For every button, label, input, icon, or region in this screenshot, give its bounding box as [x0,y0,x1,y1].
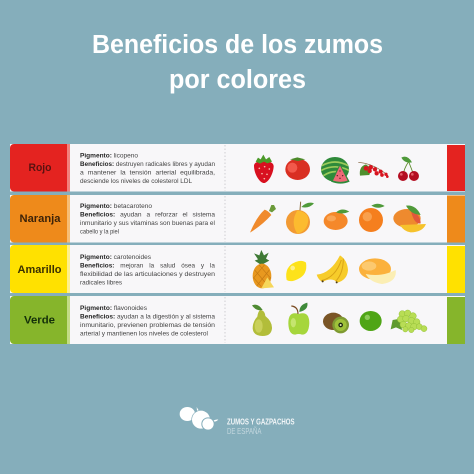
icon: lemon [286,261,306,281]
logo [180,407,295,436]
label: Naranja: Naranja [20,213,61,225]
text: rojo benefits: Beneficios: destruyen radicales libres y ayudan [80,161,216,168]
text: verde benefits [80,305,216,338]
label: Verde: Verde [24,314,55,326]
label: Amarillo [10,245,70,293]
text: verde benefits: Beneficios: ayudan a la digestión y al sistema [80,314,216,320]
icon: orange [359,204,385,232]
icon: tomato [285,157,310,180]
icon: melon [359,258,396,284]
text: rojo benefits: a mantener la tensión arterial equilibrada, [80,170,215,176]
icons: green fruits [252,303,427,336]
icon: redcurrants [358,162,389,178]
icon: pineapple [253,250,274,288]
text: rojo benefits [80,152,216,185]
text: rojo benefits: desciende los niveles de colesterol LDL [80,178,193,185]
text: rojo benefits: Pigmento: licopeno [80,152,139,160]
text: amarillo benefits [80,254,216,286]
text: naranja benefits: cabello y la piel [80,228,119,236]
label: Verde [10,296,70,344]
logo: DE ESPAÑA [227,426,262,436]
icon: pear [252,305,272,336]
panel: naranja [10,195,465,242]
icon: carrot [250,205,276,233]
text: verde benefits: arterial y mantienen los niveles de colesterol [80,330,208,338]
text: naranja benefits: Pigmento: betacaroteno [80,203,153,210]
title: por colores [169,66,306,94]
text: amarillo benefits: flexibilidad de las articulaciones y destruyen [80,271,216,278]
icon: tangerine [324,209,349,230]
icon: strawberry [254,155,274,183]
icon: peach [286,202,314,234]
icons: red fruits [254,155,419,184]
icon: mango [393,206,426,232]
text: verde benefits: inmunitario, previenen problemas de tensión [80,322,216,329]
title: Beneficios de los zumos [92,31,383,59]
label: Rojo: Rojo [28,162,52,174]
label: Rojo [10,144,70,192]
icon: watermelon [321,157,350,184]
icon: lime [360,311,382,331]
title [92,31,383,94]
text: naranja benefits: Beneficios: ayudan a reforzar el sistema [80,212,216,218]
icon: kiwi [323,313,349,333]
icon: grapes [391,310,427,333]
text: amarillo benefits: radicales libres [80,280,122,286]
text: verde benefits: Pigmento: flavonoides [80,305,147,312]
text: naranja benefits [80,203,216,236]
text: amarillo benefits: Pigmento: carotenoides [80,254,151,261]
icons: orange fruits [250,202,426,234]
logo text: ZUMOS Y GAZPACHOS [227,416,295,426]
text: naranja benefits: inmunitario y sus vitaminas son buenas para el [80,220,215,227]
panel: amarillo [10,245,465,293]
label: Amarillo: Amarillo [18,264,62,276]
panel: verde [10,296,465,344]
label: Naranja [10,195,70,242]
icon: apple [288,303,309,335]
icon: bananas [317,255,348,283]
text: amarillo benefits: Beneficios: mejoran la salud ósea y la [80,262,216,270]
icon: cherries [398,157,419,181]
panel: rojo [10,144,465,192]
icons: yellow fruits [253,250,396,288]
icon: logo fruits [180,407,218,431]
